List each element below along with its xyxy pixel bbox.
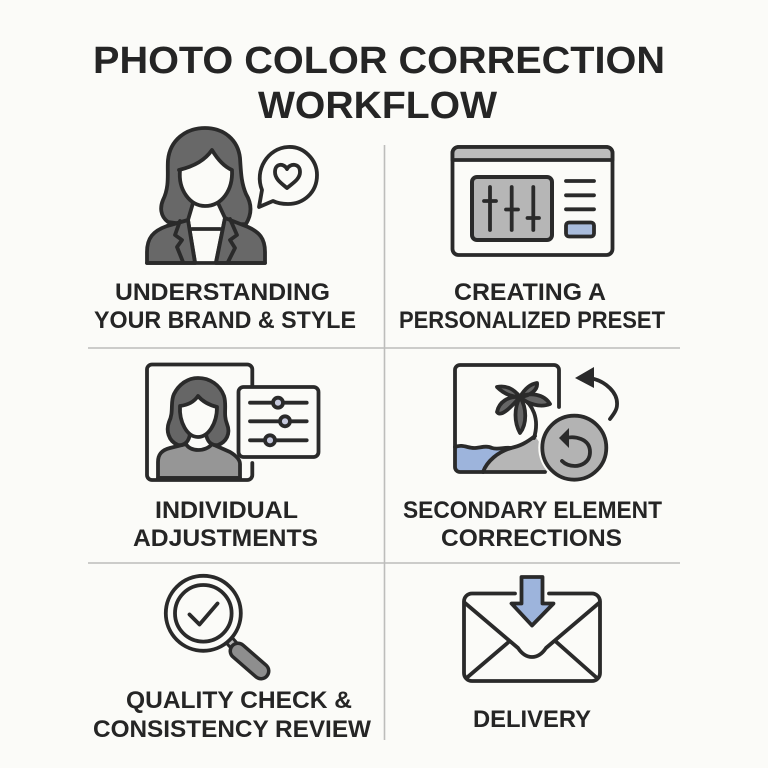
- label: CONSISTENCY REVIEW: [93, 716, 371, 743]
- label: [94, 279, 356, 334]
- label: QUALITY CHECK &: [126, 687, 352, 714]
- label: PERSONALIZED PRESET: [399, 307, 665, 334]
- icon: portrait with adjustment sliders: [147, 364, 318, 480]
- label: UNDERSTANDING: [115, 279, 330, 306]
- panel: individual adjustments: [133, 364, 318, 552]
- title: [93, 40, 665, 127]
- label: [403, 497, 662, 552]
- icon: magnifying glass with check mark: [166, 576, 261, 671]
- panel: quality check and consistency review: [93, 576, 371, 743]
- icon: palm photo with undo badge: [455, 365, 617, 484]
- icon: woman with heart speech bubble: [147, 128, 317, 263]
- label: CORRECTIONS: [441, 525, 622, 552]
- panel: delivery: [464, 577, 600, 733]
- label: DELIVERY: [473, 706, 591, 733]
- title: WORKFLOW: [258, 85, 497, 127]
- label: CREATING A: [454, 279, 606, 306]
- panel: secondary element corrections: [403, 365, 662, 552]
- label: ADJUSTMENTS: [133, 525, 318, 552]
- label: SECONDARY ELEMENT: [403, 497, 662, 524]
- title: PHOTO COLOR CORRECTION: [93, 40, 665, 82]
- label: [399, 279, 665, 334]
- panel: understanding your brand and style: [94, 128, 356, 334]
- label: [93, 687, 371, 743]
- icon: envelope with download arrow: [464, 577, 600, 681]
- label: [133, 497, 318, 552]
- icon: preset window with sliders: [452, 147, 612, 255]
- panel: creating a personalized preset: [399, 147, 665, 334]
- label: INDIVIDUAL: [155, 497, 298, 524]
- label: YOUR BRAND & STYLE: [94, 307, 356, 334]
